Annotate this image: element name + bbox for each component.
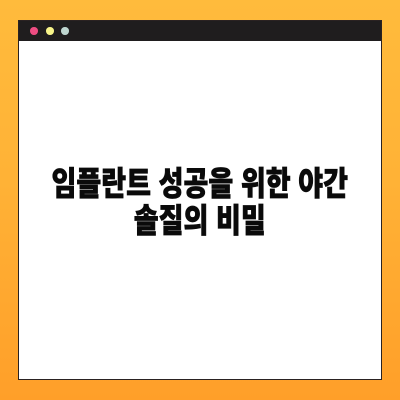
title: 솔질의 비밀 [134, 194, 266, 242]
title [51, 157, 348, 242]
icon: pink window dot [30, 27, 38, 34]
icon: grey window dot [61, 27, 68, 34]
title: 임플란트 성공을 위한 야간 [51, 157, 348, 205]
icon: yellow window dot [46, 27, 54, 34]
window title bar [19, 21, 381, 41]
